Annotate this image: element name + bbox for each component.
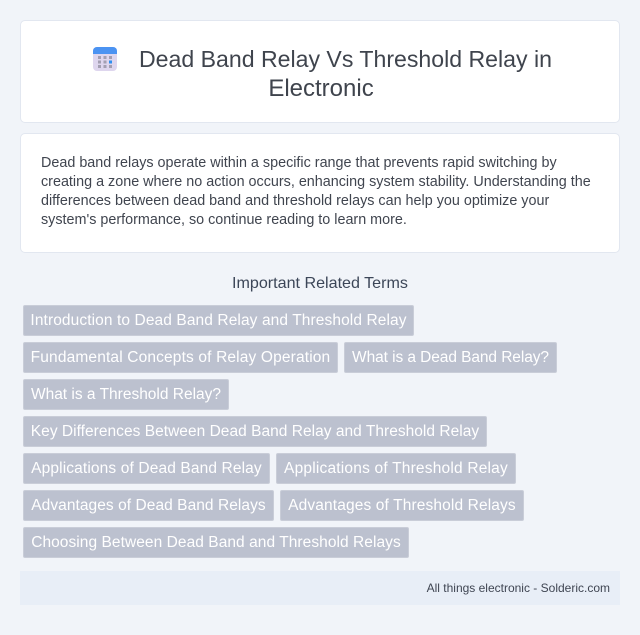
chip: What is a Threshold Relay? [31,386,221,403]
title: Electronic [268,75,374,102]
chip [23,305,414,336]
icon: calendar [93,47,117,71]
chip [23,379,229,410]
term chips [23,305,557,558]
chip [23,527,409,558]
title: Dead Band Relay Vs Threshold Relay in [139,46,552,72]
footer [20,571,620,605]
title [139,46,552,102]
chip [23,490,274,521]
intro text: system's performance, so continue reading to learn more. [41,212,407,228]
chip: Applications of Threshold Relay [284,460,508,477]
intro text: differences between dead band and threshold relays can help you optimize your [41,193,549,209]
title card [20,20,620,123]
chip: What is a Dead Band Relay? [352,349,549,366]
chip: Introduction to Dead Band Relay and Threshold Relay [30,312,407,329]
intro text [41,155,591,228]
chip [23,342,338,373]
heading: important related terms: Important Related Terms [232,274,408,292]
chip: Fundamental Concepts of Relay Operation [31,349,330,366]
chip [276,453,516,484]
intro panel [20,133,620,253]
intro text: creating a zone where no action occurs, enhancing system stability. Understanding the [41,174,591,190]
footer: All things electronic - Solderic.com [427,581,610,595]
chip: Key Differences Between Dead Band Relay and Threshold Relay [31,423,479,440]
intro text: Dead band relays operate within a specific range that prevents rapid switching by [41,155,557,171]
chip [280,490,524,521]
chip [344,342,557,373]
chip: Applications of Dead Band Relay [31,460,262,477]
chip [23,416,487,447]
chip: Choosing Between Dead Band and Threshold Relays [31,534,401,551]
chip: Advantages of Dead Band Relays [31,497,266,514]
chip: Advantages of Threshold Relays [288,497,516,514]
chip [23,453,270,484]
